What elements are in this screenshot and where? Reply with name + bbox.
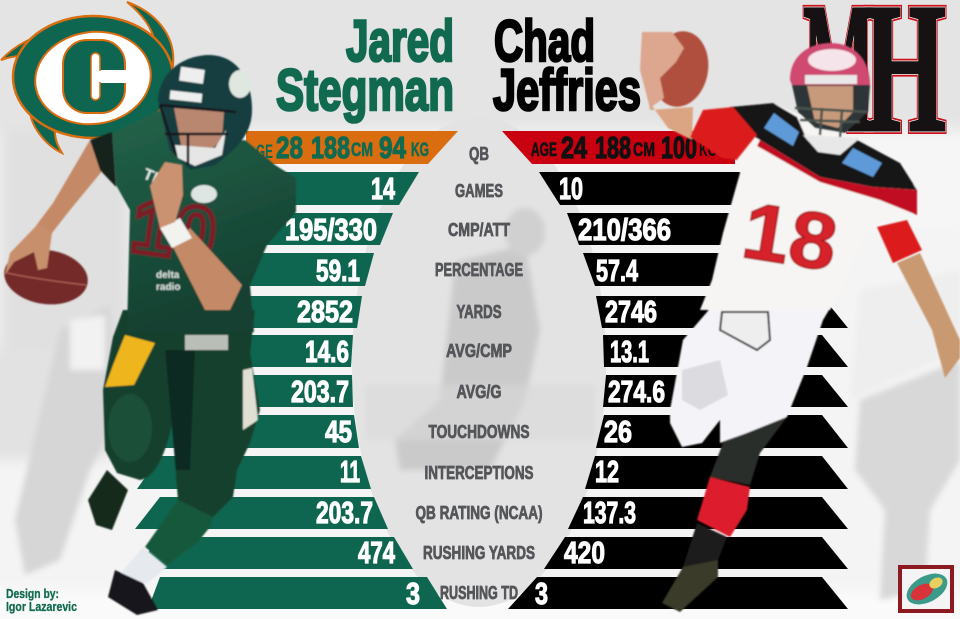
shoulder yoke	[730, 103, 917, 190]
heading: Chad Jeffries	[493, 9, 641, 123]
left arm	[10, 140, 103, 262]
lighter knee	[108, 394, 152, 462]
left profile bar: age height weight: 94	[379, 130, 407, 165]
player: Jared Stegman in green uniform	[1, 55, 296, 615]
category labels: GAMES	[455, 181, 503, 201]
left stat bars	[135, 172, 447, 609]
red stripe	[757, 140, 917, 215]
category labels: RUSHING TD	[440, 583, 518, 603]
category labels: INTERCEPTIONS	[424, 463, 534, 483]
helmet logo	[229, 70, 251, 98]
credit: Design by Igor Lazarevic: Design by:	[6, 586, 59, 601]
logo: Stegman team C swirl	[1, 2, 173, 153]
right stat values: 57.4	[596, 253, 639, 288]
face	[174, 108, 224, 152]
heading: Chad Jeffries: Chad	[494, 9, 595, 74]
right stat values: 210/366	[578, 212, 671, 247]
left profile bar: age height weight: 188	[311, 130, 350, 165]
right profile bar: age height weight: 24	[561, 130, 588, 165]
facemask	[795, 108, 868, 138]
raised hand	[150, 162, 183, 228]
sponsor text: radio	[156, 282, 180, 293]
jersey number 10: 10	[126, 183, 221, 279]
jersey	[700, 103, 917, 310]
left stat values: 59.1	[316, 253, 360, 288]
sponsor text	[156, 270, 180, 293]
heading: Jared Stegman	[276, 9, 454, 123]
left stat values: 195/330	[285, 212, 377, 247]
facemask	[160, 105, 236, 165]
category labels: AVG/G	[456, 382, 502, 402]
thigh tag	[243, 368, 258, 430]
sponsor text: delta	[156, 270, 180, 281]
left profile bar: age height weight: 28	[276, 130, 303, 165]
hand	[640, 32, 684, 108]
category labels: RUSHING YARDS	[423, 543, 535, 563]
face guard dark	[792, 85, 870, 133]
right profile bar: age height weight	[502, 130, 735, 165]
category labels: AVG/CMP	[446, 341, 512, 361]
ankle	[683, 523, 727, 567]
jersey	[112, 110, 296, 332]
helmet	[158, 55, 252, 170]
jersey number 18: 18	[737, 185, 843, 288]
right profile bar: age height weight: 188	[595, 130, 631, 165]
right profile bar: age height weight: 100	[661, 130, 697, 165]
right stat values: 13.1	[610, 334, 649, 369]
red shoulder sleeve	[690, 107, 757, 160]
football	[1, 244, 91, 310]
football	[646, 27, 714, 111]
collar	[803, 135, 860, 155]
left profile bar: age height weight: KG	[411, 140, 429, 161]
icon: flag football badge	[900, 567, 953, 611]
helmet crown	[808, 49, 856, 71]
right stat values: 137.3	[583, 495, 636, 530]
jersey logo	[191, 185, 217, 203]
left stat values: 474	[358, 535, 396, 570]
right stat bars	[508, 172, 848, 609]
hand over ball	[5, 224, 52, 275]
heading: Jared Stegman: Stegman	[276, 58, 454, 123]
heading: Jared Stegman: Jared	[346, 9, 454, 74]
category labels: QB RATING (NCAA)	[416, 503, 542, 523]
category labels: TOUCHDOWNS	[428, 422, 530, 442]
helmet sponsors	[170, 67, 205, 103]
calf	[145, 500, 213, 565]
right stat values: 274.6	[608, 374, 665, 409]
cleat	[662, 560, 718, 612]
front cleat	[108, 570, 158, 615]
credit: Design by Igor Lazarevic: Igor Lazarevic	[6, 599, 77, 614]
left stat values: 2852	[297, 294, 353, 329]
belt pad	[185, 335, 228, 350]
pants	[103, 310, 260, 517]
player: Chad Jeffries in white uniform	[640, 27, 960, 612]
shoulder sponsors	[764, 113, 882, 177]
left profile bar: age height weight: CM	[351, 140, 373, 161]
chin pad	[175, 130, 226, 166]
forearm	[172, 228, 242, 310]
left stat values: 14.6	[305, 334, 349, 369]
credit: Design by Igor Lazarevic	[6, 586, 77, 614]
right stat values: 26	[604, 414, 632, 449]
right stat values: 10	[559, 171, 583, 206]
face	[807, 86, 853, 128]
category labels: QB	[469, 144, 489, 164]
left stat values: 11	[340, 454, 360, 489]
category labels: PERCENTAGE	[435, 260, 523, 280]
black sleeve	[90, 132, 116, 187]
sponsor text TNT: TNT	[141, 166, 176, 193]
wrist tape	[160, 218, 192, 248]
right profile bar: age height weight: AGE	[531, 140, 557, 161]
left stat values: 203.7	[291, 374, 349, 409]
left profile bar: age height weight: GE	[256, 142, 273, 163]
pants shadow	[682, 360, 728, 410]
right stat values: 420	[564, 535, 605, 570]
right profile bar: age height weight: KG	[699, 140, 717, 161]
white sock	[115, 547, 167, 583]
left stat values	[285, 171, 420, 611]
shadow between legs	[165, 350, 195, 470]
helmet band	[805, 75, 857, 84]
category labels	[416, 144, 542, 603]
yellow pants patch	[105, 335, 155, 387]
red sock	[697, 477, 750, 537]
category labels: YARDS	[456, 302, 502, 322]
left stat values: 14	[371, 171, 396, 206]
left stat values: 203.7	[316, 495, 373, 530]
right stat values: 12	[595, 454, 619, 489]
right profile bar: age height weight: CM	[633, 140, 655, 161]
helmet	[790, 43, 870, 85]
back cleat	[88, 470, 128, 530]
red armband	[877, 220, 922, 263]
right stat values: 3	[535, 576, 548, 611]
pants	[670, 305, 832, 447]
throwing arm	[640, 50, 693, 140]
left stat values: 3	[406, 576, 420, 611]
right arm skin	[897, 253, 960, 378]
belt pad	[720, 312, 770, 350]
right stat values: 2746	[605, 294, 657, 329]
right stat values	[535, 171, 671, 611]
left profile bar: age height weight	[246, 130, 458, 165]
ball seam	[7, 273, 86, 285]
heading: Chad Jeffries: Jeffries	[493, 58, 641, 123]
category labels: CMP/ATT	[448, 220, 510, 240]
left stat values: 45	[325, 414, 352, 449]
lower leg sleeve	[710, 417, 787, 485]
